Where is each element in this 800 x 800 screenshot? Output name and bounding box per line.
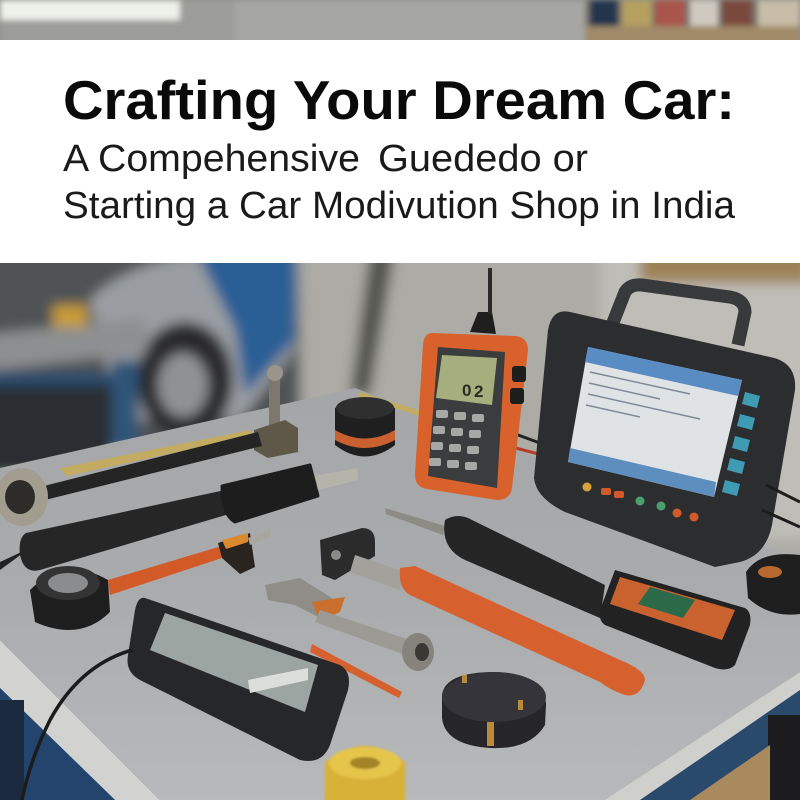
title banner <box>0 40 800 263</box>
icon: handheld multimeter <box>415 268 528 500</box>
subtitle line 2: Starting a Car Modivution Shop in India <box>63 185 736 227</box>
icon: soldering tool <box>385 508 605 618</box>
icon: black handled tool <box>0 465 358 571</box>
front buttons <box>582 482 592 492</box>
icon: orange tester module <box>600 570 750 669</box>
tablet handle <box>612 285 745 345</box>
icon: scanner cable <box>22 650 132 800</box>
icon: multimeter leads <box>508 432 548 456</box>
icon: round puck <box>442 672 546 748</box>
title line: Crafting Your Dream Car: <box>63 69 735 131</box>
icon: black roll at right <box>746 554 800 615</box>
side buttons <box>722 392 760 496</box>
tablet screen <box>568 347 742 497</box>
icon: long tool upper left <box>0 432 262 526</box>
icon: black ring with orange rod <box>30 530 271 630</box>
table legs and frame <box>0 688 115 800</box>
icon: handheld multimeter: 2 <box>474 382 483 401</box>
icon: small orange pick <box>310 644 402 698</box>
keypad <box>429 410 484 470</box>
background: top photo strip <box>0 0 800 46</box>
icon: yellow spool <box>325 746 405 800</box>
icon: right cables <box>762 485 800 527</box>
icon: rear coupling <box>335 397 395 456</box>
subtitle line 1: A Compehensive <box>63 138 360 180</box>
subtitle line 1: Guededo or <box>378 138 588 180</box>
table front edge <box>0 640 160 800</box>
icon: black handheld scanner <box>128 598 349 761</box>
icon: diagnostic tablet <box>534 285 795 567</box>
icon: handheld multimeter: 0 <box>462 381 471 400</box>
tablet body <box>534 311 795 567</box>
icon: rear post bracket <box>254 365 298 458</box>
photo background: garage <box>0 240 800 640</box>
icon: small ratchet wrench <box>265 578 434 671</box>
icon: clamp tool with orange handle <box>320 528 645 695</box>
yellow stripe <box>60 430 252 476</box>
table <box>0 388 800 800</box>
